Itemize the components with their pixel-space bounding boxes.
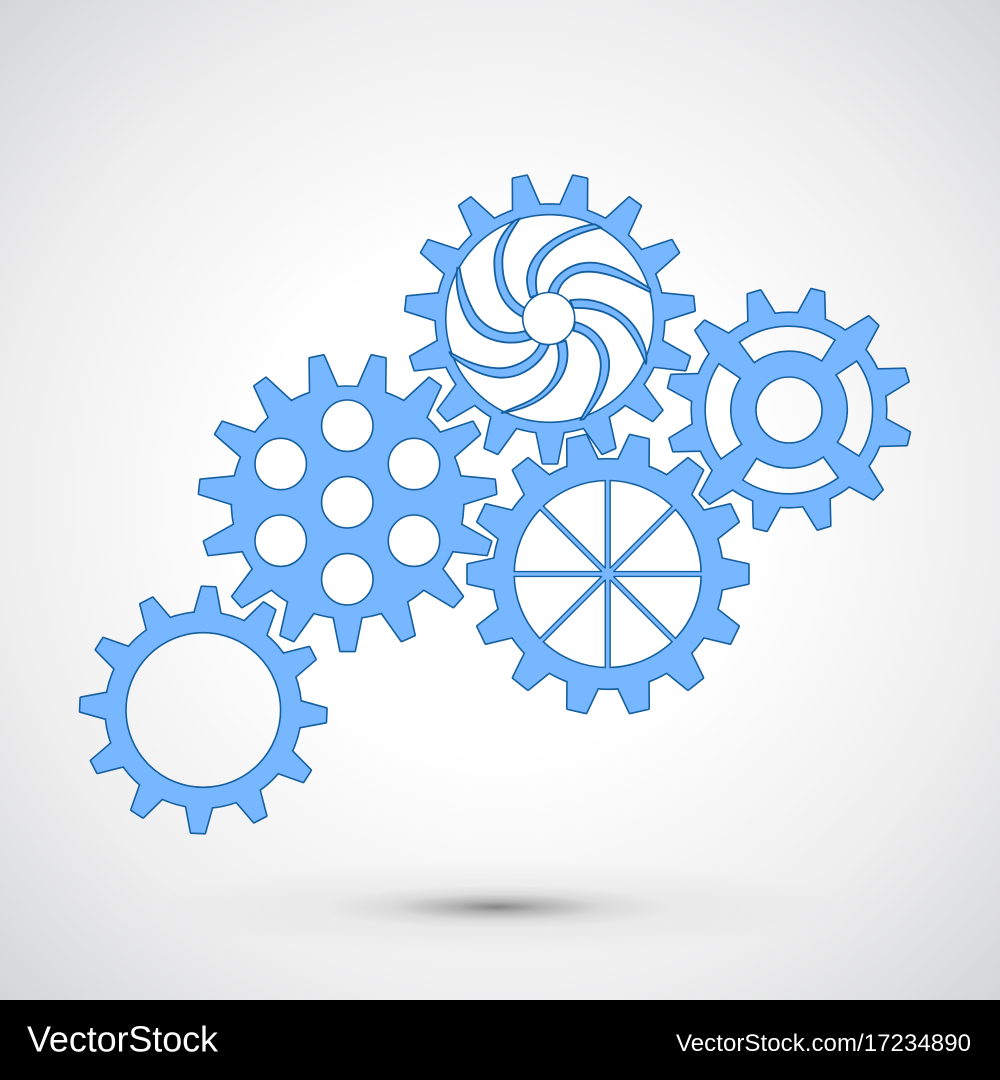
ground shadow xyxy=(150,859,850,955)
gear: window ring, right xyxy=(667,288,911,532)
gear: eight spoke wheel, lower centre xyxy=(468,434,748,714)
gear: open ring, lower left xyxy=(80,587,327,833)
footer image url text: VectorStock.com/17234890 xyxy=(676,1030,971,1057)
footer logo text: VectorStock xyxy=(27,1018,219,1060)
gear: seven round holes, centre left xyxy=(198,354,497,651)
gear: spiral turbine, top centre xyxy=(405,175,695,463)
footer bar xyxy=(0,1000,1000,1080)
